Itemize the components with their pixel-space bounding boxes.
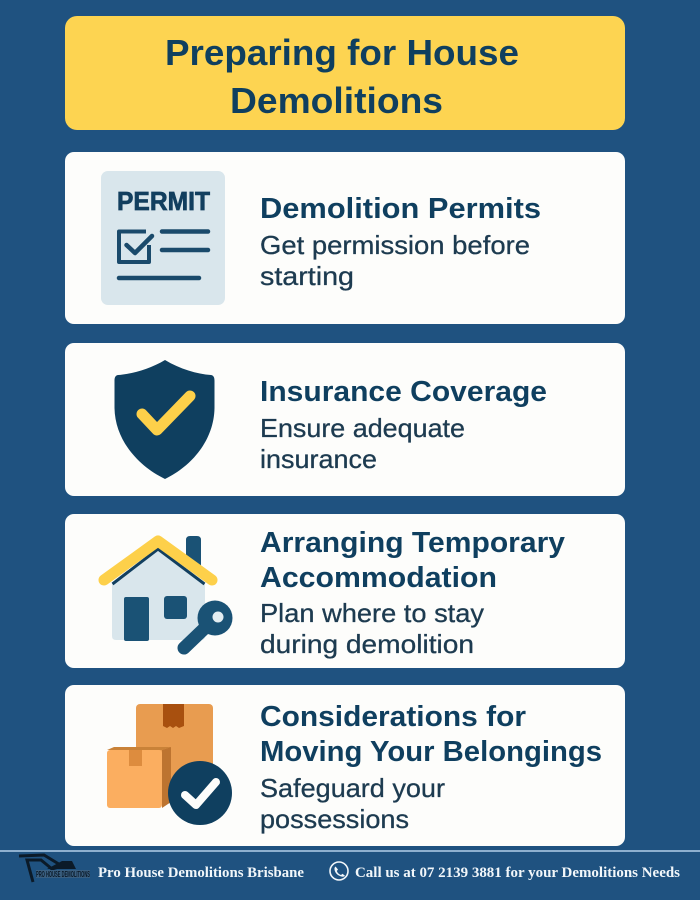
text: belongings description: Safeguard your: [260, 773, 445, 803]
text: insurance description: insurance: [260, 444, 377, 474]
icon: shield with check: [114, 360, 214, 479]
footer bar: [19, 855, 680, 882]
heading: demolition permits: Demolition Permits: [260, 193, 541, 225]
panel: temporary accommodation: [65, 514, 625, 668]
heading: moving belongings: Considerations for: [260, 701, 526, 733]
text: belongings description: possessions: [260, 804, 409, 834]
text: accommodation description: Plan where to stay: [260, 598, 484, 628]
heading: insurance coverage: Insurance Coverage: [260, 376, 547, 408]
text: belongings description: [260, 773, 445, 834]
text: insurance description: [260, 413, 465, 474]
footer business name: Pro House Demolitions Brisbane: [98, 865, 305, 881]
text: permits description: [260, 230, 530, 291]
panel: demolition permits: [65, 152, 625, 324]
footer call to action: Call us at 07 2139 3881 for your Demolitions Needs: [355, 865, 680, 881]
icon: house and key: [104, 536, 232, 648]
text: permits description: Get permission before: [260, 230, 530, 260]
text: permits description: starting: [260, 261, 354, 291]
icon: phone: [330, 862, 348, 880]
icon: excavator logo: PRO HOUSE DEMOLITIONS: [36, 870, 90, 879]
title banner: [65, 16, 625, 130]
heading: temporary accommodation: Arranging Temporary: [260, 527, 565, 559]
panel: moving belongings: [65, 685, 625, 846]
heading: moving belongings: [260, 701, 602, 768]
heading: temporary accommodation: [260, 527, 565, 594]
heading: temporary accommodation: Accommodation: [260, 562, 497, 594]
text: accommodation description: during demolition: [260, 629, 474, 659]
heading: moving belongings: Moving Your Belongings: [260, 736, 602, 768]
icon: excavator logo: [19, 855, 90, 882]
icon: permit document: PERMIT: [117, 186, 210, 216]
title banner: Preparing for House: [165, 32, 519, 73]
title banner: Demolitions: [230, 80, 443, 121]
text: accommodation description: [260, 598, 484, 659]
icon: permit document: [101, 171, 225, 305]
panel: insurance coverage: [65, 343, 625, 496]
text: insurance description: Ensure adequate: [260, 413, 465, 443]
icon: boxes with check: [107, 704, 232, 825]
